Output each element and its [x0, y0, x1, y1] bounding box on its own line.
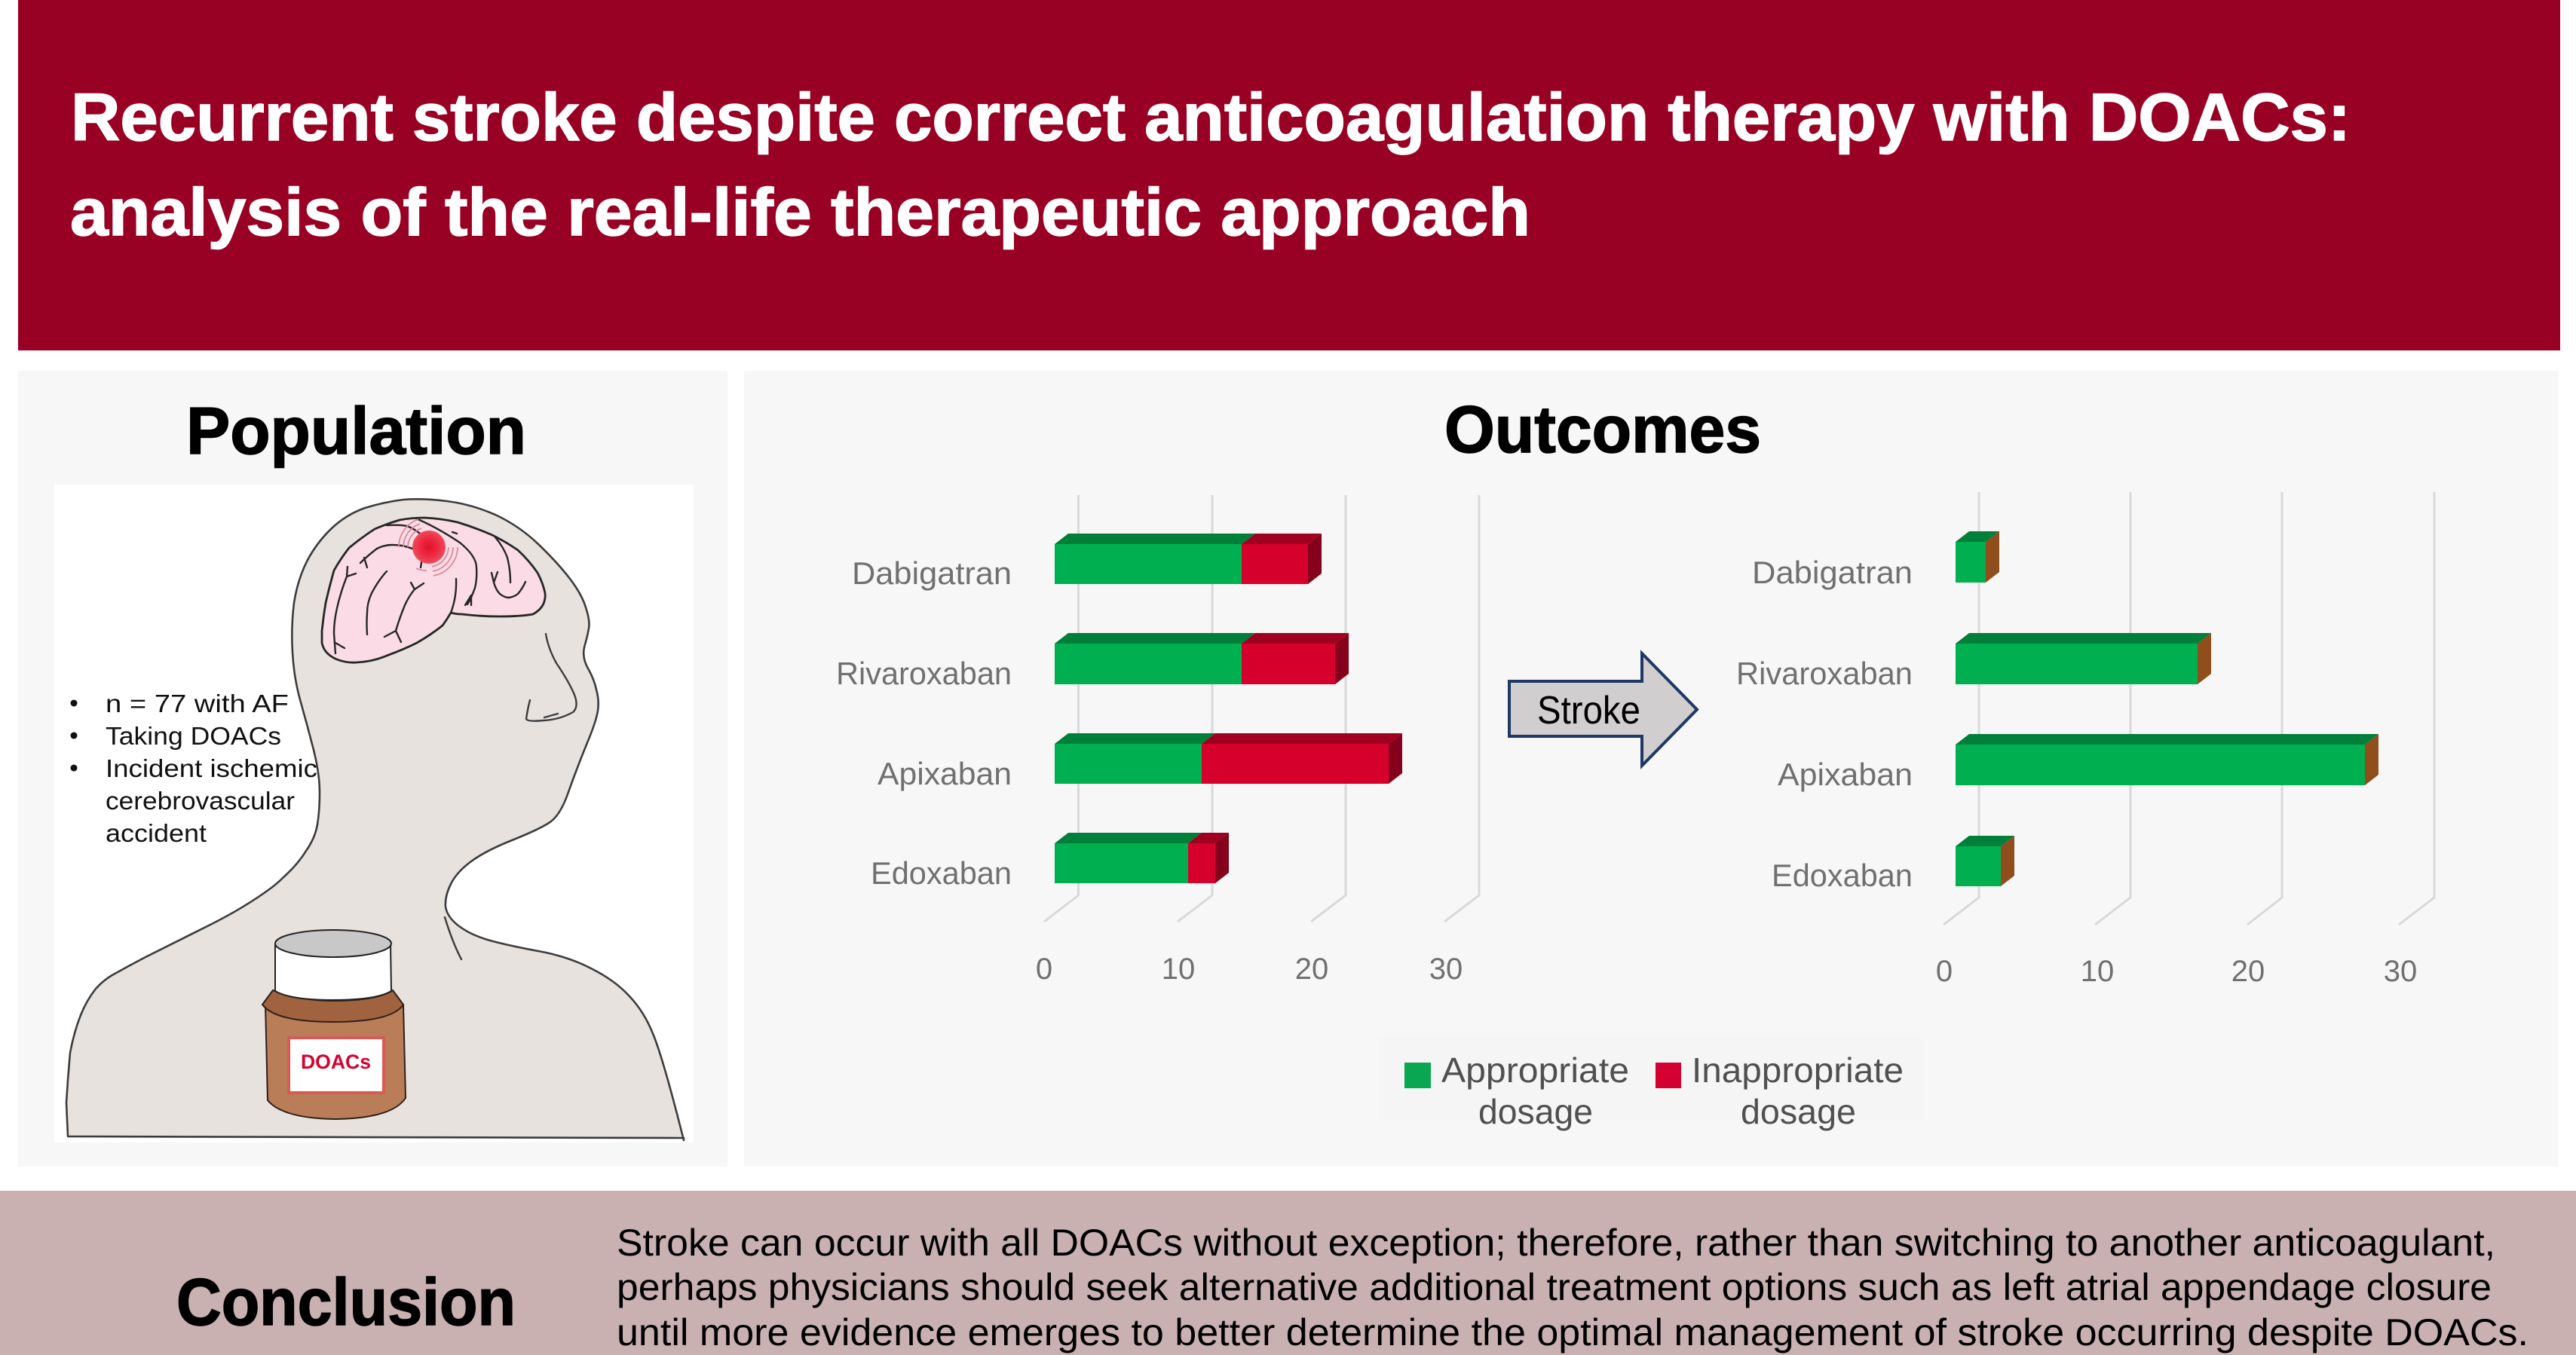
axis numbers: 30: [1429, 953, 1463, 986]
bar chart: dosage before stroke: [836, 495, 1479, 986]
conclusion text: until more evidence emerges to better determine the optimal management of stroke occurring despite DOACs.: [617, 1311, 2529, 1353]
legend item: inappropriate dosage: dosage: [1741, 1092, 1856, 1131]
bar: Dabigatran after: [1956, 531, 1999, 583]
bar: Rivaroxaban before: [1055, 633, 1349, 684]
category labels: Dabigatran: [852, 555, 1012, 591]
legend item: appropriate dosage: Appropriate: [1441, 1051, 1629, 1090]
bar: Edoxaban after: [1956, 836, 2014, 886]
category labels: Edoxaban: [871, 855, 1012, 891]
category labels: Edoxaban: [1772, 858, 1913, 893]
face and neck lines: [445, 634, 577, 959]
axis numbers: 10: [2081, 955, 2114, 988]
axis numbers: 0: [1936, 955, 1953, 988]
conclusion text: perhaps physicians should seek alternative additional treatment options such as left atrial appendage closure: [617, 1266, 2492, 1308]
title: [70, 79, 2351, 249]
axis numbers: 20: [1295, 953, 1328, 986]
heading: population: Population: [186, 393, 526, 468]
legend item: appropriate dosage: [1404, 1051, 1629, 1131]
DOACs jar: [262, 930, 406, 1119]
illustration: head with brain and DOACs jar: [54, 485, 694, 1142]
population criteria list: Incident ischemic: [106, 754, 317, 782]
category labels: Apixaban: [878, 756, 1012, 791]
category labels: Rivaroxaban: [1736, 656, 1913, 691]
bar: Edoxaban before: [1055, 833, 1229, 883]
population criteria list: cerebrovascular: [106, 787, 295, 815]
heading: outcomes: Outcomes: [1444, 392, 1761, 466]
brain: [322, 518, 545, 662]
legend item: inappropriate dosage: [1656, 1051, 1904, 1131]
axis numbers: [1936, 955, 2417, 988]
jar label: DOACs: [301, 1051, 371, 1073]
conclusion text: Stroke can occur with all DOACs without exception; therefore, rather than switching to another anticoagulant,: [617, 1222, 2495, 1264]
heading: conclusion: Conclusion: [176, 1265, 516, 1339]
arrow: stroke: [1509, 653, 1697, 766]
legend item: inappropriate dosage: Inappropriate: [1692, 1051, 1904, 1090]
population criteria list: [71, 690, 317, 847]
axis numbers: 0: [1036, 953, 1052, 986]
panel: conclusion: [0, 1191, 2576, 1355]
panel: population: [18, 371, 727, 1167]
title: analysis of the real-life therapeutic approach: [70, 174, 1530, 249]
category labels: Rivaroxaban: [836, 656, 1012, 691]
arrow label: Stroke: [1537, 689, 1640, 733]
population criteria list: Taking DOACs: [106, 722, 281, 750]
category labels: [1736, 555, 1913, 893]
axis numbers: 30: [2384, 955, 2417, 988]
axis numbers: 20: [2231, 955, 2265, 988]
panel: outcomes: [744, 371, 2558, 1167]
bar: Dabigatran before: [1055, 534, 1322, 584]
legend item: appropriate dosage: dosage: [1478, 1092, 1593, 1131]
category labels: Dabigatran: [1752, 555, 1913, 590]
axis numbers: [1036, 953, 1463, 986]
title: Recurrent stroke despite correct anticoagulation therapy with DOACs:: [71, 79, 2351, 154]
header banner: [18, 0, 2560, 350]
bar: Apixaban before: [1055, 733, 1402, 784]
bar: Rivaroxaban after: [1956, 633, 2211, 684]
category labels: Apixaban: [1778, 757, 1913, 792]
axis numbers: 10: [1162, 953, 1195, 986]
bar chart: dosage at stroke: [1736, 492, 2434, 988]
population criteria list: n = 77 with AF: [106, 690, 289, 717]
conclusion text: [617, 1222, 2529, 1353]
legend: [1378, 1038, 1925, 1131]
population criteria list: accident: [106, 819, 207, 847]
category labels: [836, 555, 1012, 891]
head and shoulders silhouette: [66, 499, 684, 1140]
bar: Apixaban after: [1956, 734, 2378, 785]
stroke lesion: [399, 519, 458, 576]
